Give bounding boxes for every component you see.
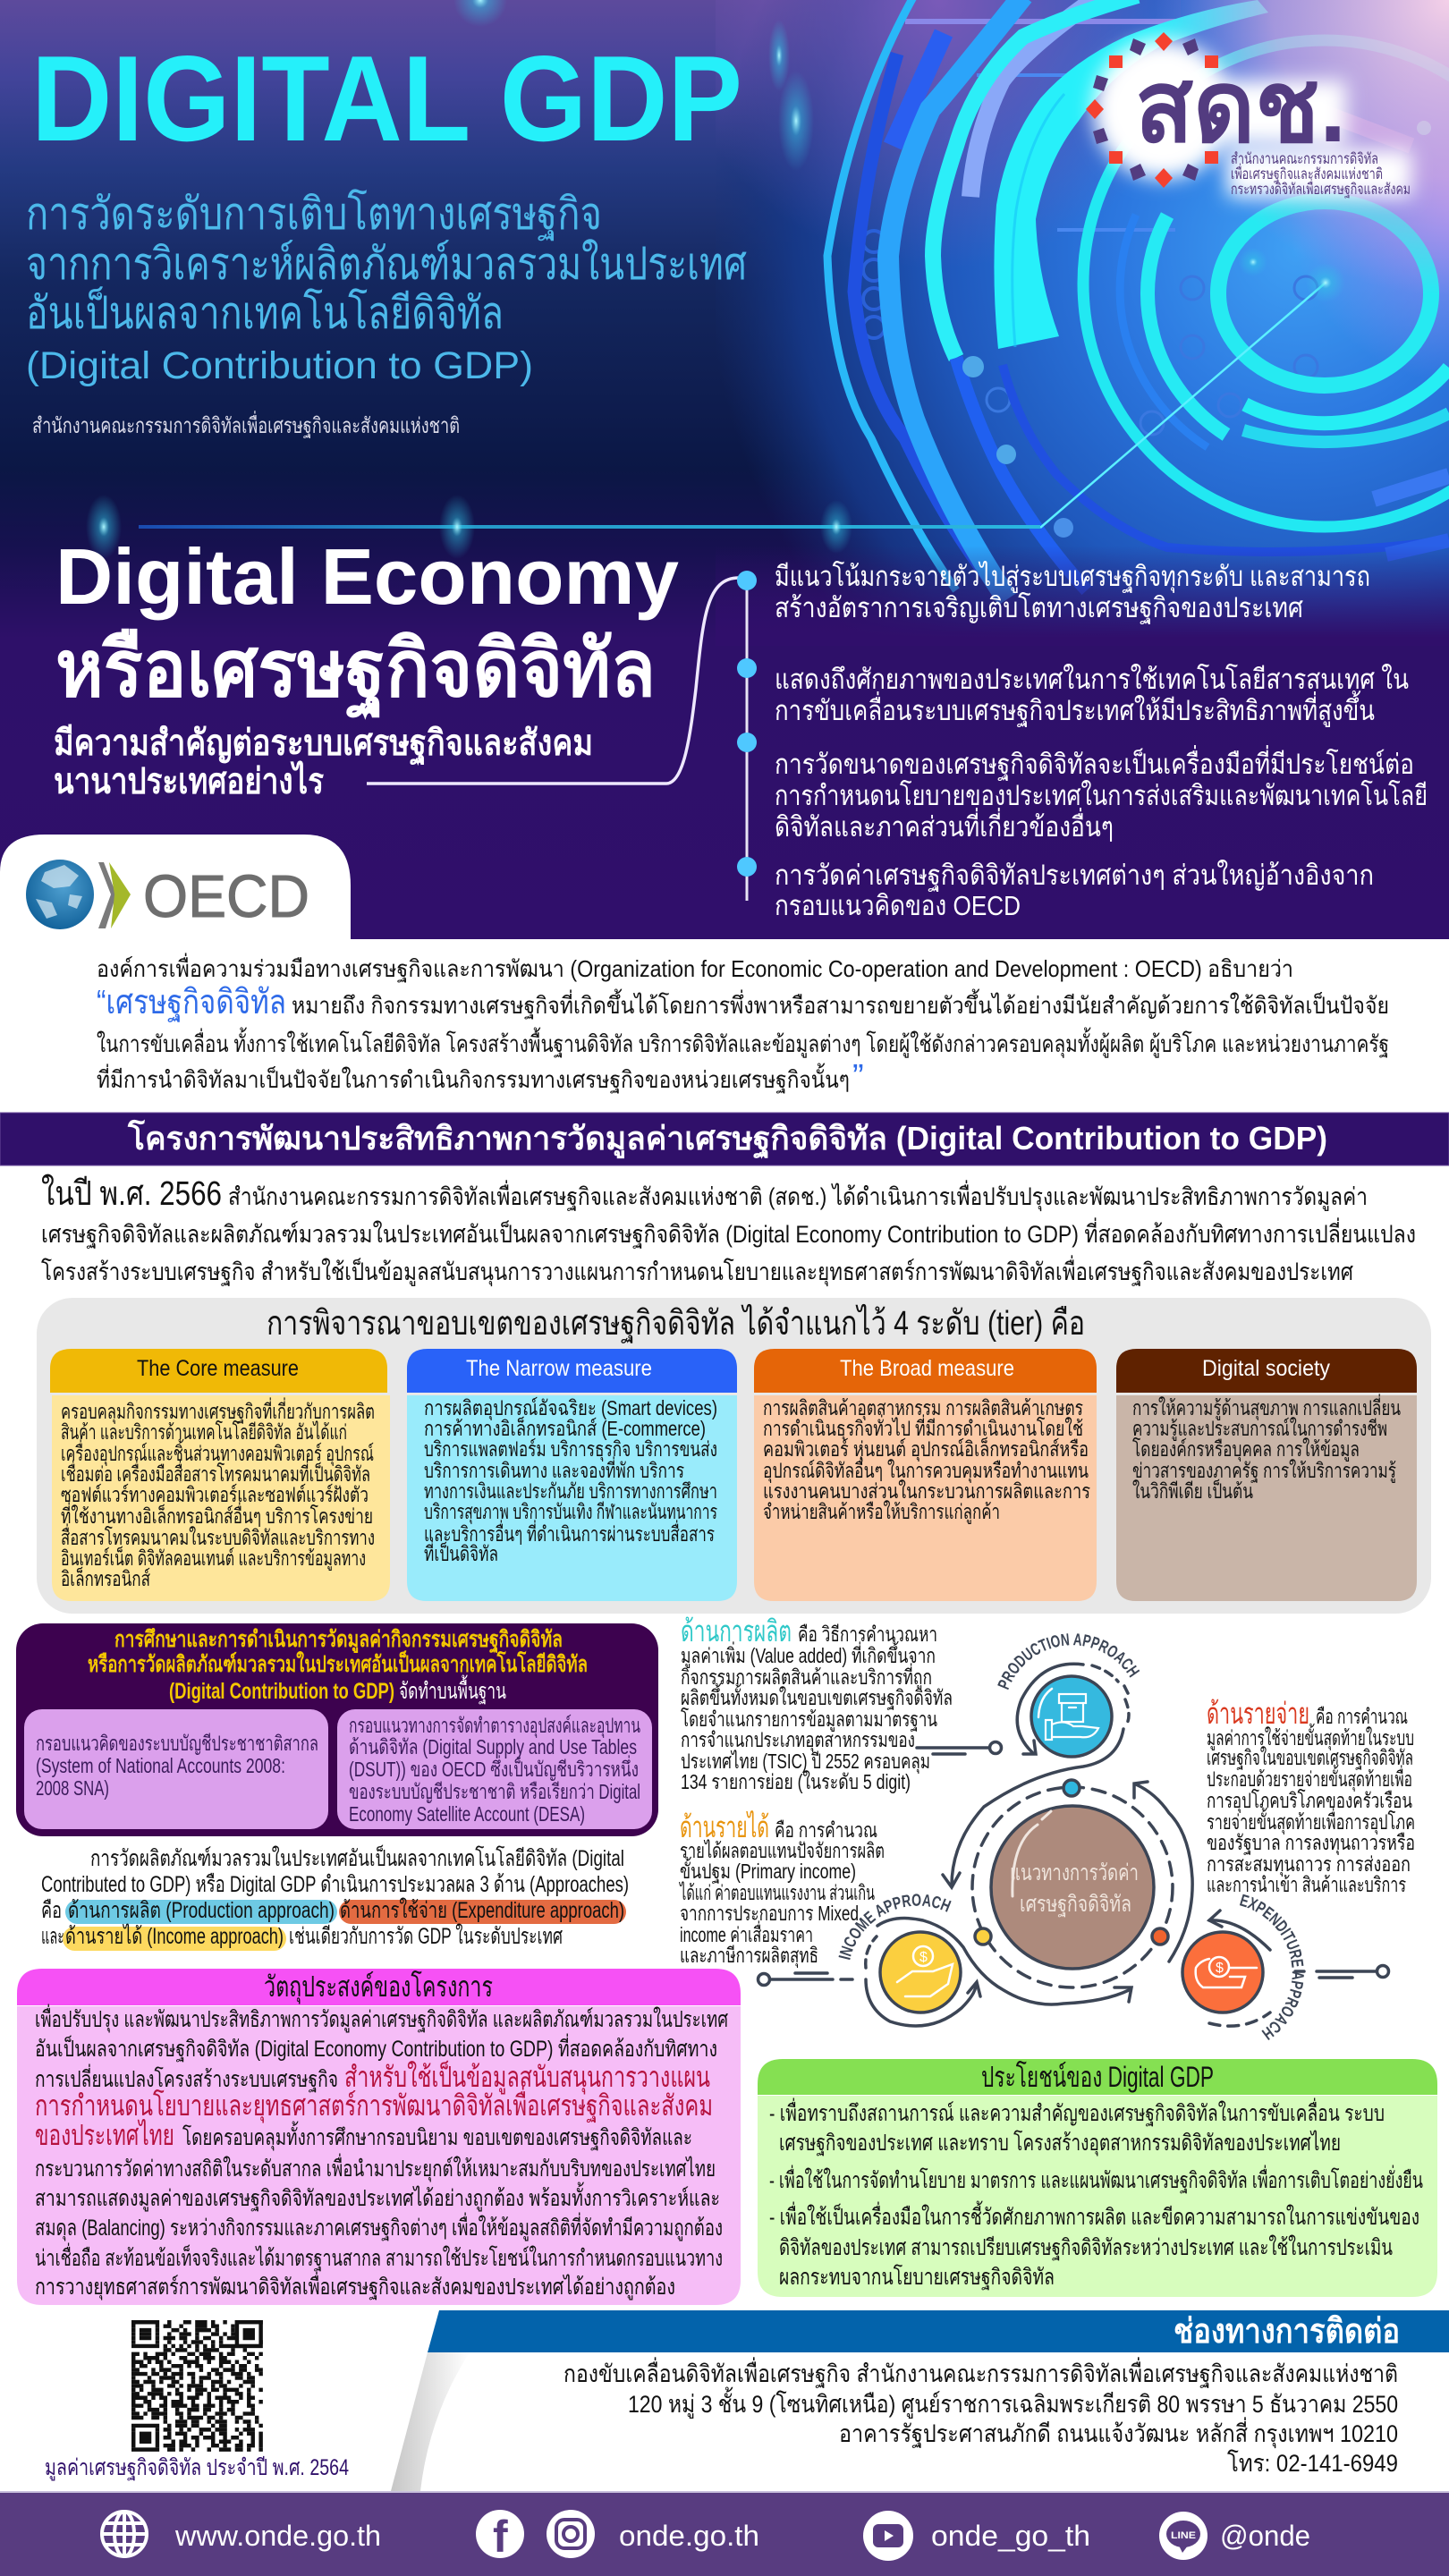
text block: three approaches: เช่นเดียวกับการวัด GDP ในระดับประเทศ — [289, 1923, 563, 1949]
panel: contact: ช่องทางการติดต่อ — [1174, 2313, 1400, 2351]
youtube text: onde_go_th — [931, 2520, 1090, 2552]
panel: project objectives: การเปลี่ยนแปลงโครงสร้างระบบเศรษฐกิจ — [35, 2063, 338, 2092]
text block: three approaches: การวัดผลิตภัณฑ์มวลรวมในประเทศอันเป็นผลจากเทคโนโลยีดิจิทัล (Digital — [90, 1844, 624, 1871]
text block: income approach: คือ การคำนวณ — [775, 1818, 877, 1842]
connector line and timeline dots — [367, 571, 757, 901]
heading: digital economy: มีความสำคัญต่อระบบเศรษฐกิจและสังคม — [54, 724, 593, 767]
card: digital society — [1116, 1349, 1417, 1601]
card: narrow measure: ทางการเงินและประกันภัย บริการทางการศึกษา — [424, 1479, 717, 1503]
icon: facebook — [476, 2510, 524, 2562]
text block: income approach: ได้แก่ ค่าตอบแทนแรงงาน ส่วนเกิน — [679, 1881, 875, 1904]
panel: measurement framework: หรือการวัดผลิตภัณฑ์มวลรวมในประเทศอันเป็นผลจากเทคโนโลยีดิจิทัล — [88, 1650, 588, 1677]
card: core measure: สื่อสารโทรคมนาคมในระบบดิจิทัลและบริการทาง — [61, 1523, 375, 1549]
subtitle block: อันเป็นผลจากเทคโนโลยีดิจิทัล — [26, 286, 504, 338]
QR code — [131, 2320, 263, 2450]
card: core measure: อินเทอร์เน็ต ดิจิทัลคอนเทนต์ และบริการข้อมูลทาง — [61, 1545, 366, 1571]
box: SNA: (System of National Accounts 2008: — [36, 1754, 285, 1777]
text block: project intro — [41, 1174, 1416, 1287]
central circle: แนวทางการวัดค่า — [1010, 1860, 1139, 1885]
text block: production approach: คือ วิธีการคำนวณหา — [798, 1623, 937, 1646]
panel: measurement framework: (Digital Contribution to GDP) — [169, 1679, 394, 1704]
panel: project objectives: วัตถุประสงค์ของโครงการ — [264, 1970, 493, 2004]
heading: digital economy: นานาประเทศอย่างไร — [54, 760, 324, 801]
panel: project objectives: การกำหนดนโยบายและยุทธศาสตร์การพัฒนาดิจิทัลเพื่อเศรษฐกิจและสังคม — [35, 2086, 713, 2123]
agency name: สำนักงานคณะกรรมการดิจิทัลเพื่อเศรษฐกิจและสังคมแห่งชาติ — [32, 411, 460, 438]
card: core measure: The Core measure — [137, 1356, 299, 1381]
QR caption: มูลค่าเศรษฐกิจดิจิทัล ประจำปี พ.ศ. 2564 — [45, 2455, 349, 2481]
logo: OECD — [0, 835, 351, 939]
facebook instagram text: onde.go.th — [619, 2520, 759, 2552]
text block: three approaches: ด้านรายได้ (Income approach) — [65, 1923, 284, 1949]
card: narrow measure: The Narrow measure — [466, 1356, 652, 1381]
card: core measure: เชื่อมต่อ เครื่องมือสื่อสารโทรคมนาคมที่เป็นดิจิทัล — [61, 1460, 370, 1486]
connector lines — [758, 1742, 1388, 1986]
text block: three approaches: และ — [41, 1924, 64, 1949]
text block: three approaches: Contributed to GDP) หรือ Digital GDP ดำเนินการประมวลผล 3 ด้าน (Approaches) — [41, 1872, 629, 1897]
icon: income coin and hand: $ — [919, 1950, 928, 1965]
card: narrow measure: บริการแพลตฟอร์ม บริการธุรกิจ บริการขนส่ง — [424, 1437, 717, 1462]
card: broad measure: คอมพิวเตอร์ หุ่นยนต์ อุปกรณ์อิเล็กทรอนิกส์หรือ — [763, 1436, 1089, 1462]
node dots — [975, 1780, 1168, 1945]
panel: project objectives: โดยครอบคลุมทั้งการศึกษากรอบนิยาม ขอบเขตของเศรษฐกิจดิจิทัลและ — [182, 2121, 692, 2151]
panel: project objectives: กระบวนการวัดค่าทางสถิติในระดับสากล เพื่อนำมาประยุกต์ให้เหมาะสมกับบริบทของประเทศไทย — [35, 2153, 716, 2182]
icon: line — [1159, 2512, 1208, 2560]
text block: OECD definition: ที่มีการนำดิจิทัลมาเป็นปัจจัยในการดำเนินกิจกรรมทางเศรษฐกิจของหน่วยเศรษฐกิจนั้นๆ — [97, 1063, 850, 1094]
card: digital society: Digital society — [1202, 1356, 1330, 1381]
text block: income approach: จากการประกอบการ Mixed — [680, 1902, 859, 1925]
card: broad measure — [754, 1349, 1097, 1601]
heading: tiers: การพิจารณาขอบเขตของเศรษฐกิจดิจิทัล ได้จำแนกไว้ 4 ระดับ (tier) คือ — [267, 1304, 1085, 1343]
key points list: การวัดค่าเศรษฐกิจดิจิทัลประเทศต่างๆ ส่วนใหญ่อ้างอิงจาก — [775, 860, 1374, 892]
panel: contact — [391, 2310, 1449, 2491]
card: core measure: สินค้า และบริการด้านเทคโนโลยีดิจิทัล อันได้แก่ — [61, 1420, 347, 1444]
logo: ONDE: สำนักงานคณะกรรมการดิจิทัล — [1231, 150, 1378, 167]
panel: project objectives: น่าเชื่อถือ สะท้อนข้อเท็จจริงและได้มาตรฐานสากล สามารถใช้ประโยชน์ในการกำหนดกรอบแนวทาง — [35, 2242, 723, 2271]
card: broad measure: The Broad measure — [840, 1356, 1014, 1381]
curved labels: PRODUCTION APPROACH — [997, 1633, 1140, 1690]
panel: project objectives: เพื่อปรับปรุง และพัฒนาประสิทธิภาพการวัดมูลค่าเศรษฐกิจดิจิทัล และผลิตภัณฑ์มวลรวมในประเทศ — [35, 2004, 728, 2033]
box: DSUT: Economy Satellite Account (DESA) — [349, 1802, 585, 1826]
text block: OECD definition: ” — [852, 1058, 864, 1096]
website text: www.onde.go.th — [174, 2520, 381, 2552]
box: SNA — [24, 1709, 328, 1829]
text block: three approaches: คือ — [41, 1898, 62, 1923]
text block: three approaches: ด้านการใช้จ่าย (Expenditure approach) — [340, 1897, 624, 1923]
key points list: สร้างอัตราการเจริญเติบโตทางเศรษฐกิจของประเทศ — [775, 592, 1303, 624]
flow arrows — [866, 1664, 1270, 2026]
panel: project objectives: สมดุล (Balancing) ระหว่างกิจกรรมและภาคเศรษฐกิจต่างๆ เพื่อให้ข้อมูลสถิติที่จัดทำมีความถูกต้อง — [35, 2212, 723, 2241]
card: core measure: เครื่องอุปกรณ์และชิ้นส่วนทางคอมพิวเตอร์ อุปกรณ์ — [61, 1439, 374, 1466]
text block: income approach: income ค่าเสื่อมราคา — [680, 1920, 813, 1946]
text block: production approach: การจำแนกประเภทอุตสาหกรรมของ — [681, 1728, 915, 1752]
panel: project objectives: สำหรับใช้เป็นข้อมูลสนับสนุนการวางแผน — [344, 2060, 710, 2095]
card: narrow measure: การค้าทางอิเล็กทรอนิกส์ (E-commerce) — [424, 1415, 706, 1440]
text block: income approach: ขั้นปฐม (Primary income) — [680, 1857, 856, 1884]
subtitle block: จากการวิเคราะห์ผลิตภัณฑ์มวลรวมในประเทศ — [26, 239, 747, 289]
panel: footer — [0, 2491, 1449, 2576]
central circle — [991, 1806, 1154, 1969]
box: SNA: 2008 SNA) — [36, 1776, 109, 1800]
icon: youtube — [863, 2511, 913, 2561]
card: narrow measure: บริการสุขภาพ บริการบันเทิง กีฬาและนันทนาการ — [424, 1500, 717, 1524]
text block: production approach: มูลค่าเพิ่ม (Value added) ที่เกิดขึ้นจาก — [681, 1641, 936, 1668]
card: digital society: ในวิกิพีเดีย เป็นต้น — [1132, 1478, 1253, 1503]
card: core measure: ครอบคลุมกิจกรรมทางเศรษฐกิจที่เกี่ยวกับการผลิต — [61, 1397, 375, 1424]
curved labels: INCOME APPROACH — [839, 1894, 952, 1961]
card: core measure: ซอฟต์แวร์ทางคอมพิวเตอร์และซอฟต์แวร์ฝังตัว — [61, 1483, 369, 1506]
text block: income approach — [679, 1810, 885, 1968]
logo: ONDE: เพื่อเศรษฐกิจและสังคมแห่งชาติ — [1231, 163, 1383, 183]
text block: OECD definition: “เศรษฐกิจดิจิทัล — [97, 984, 286, 1022]
panel: measurement framework: การศึกษาและการดำเนินการวัดมูลค่ากิจกรรมเศรษฐกิจดิจิทัล — [114, 1627, 563, 1654]
text block: production approach: 134 รายการย่อย (ในระดับ 5 digit) — [681, 1770, 911, 1793]
central circle: เศรษฐกิจดิจิทัล — [1020, 1892, 1131, 1917]
text block: production approach: ด้านการผลิต — [681, 1614, 792, 1648]
text block: income approach: และภาษีการผลิตสุทธิ — [680, 1944, 818, 1968]
icon: income coin and hand — [880, 1932, 961, 2012]
text block: project intro: ในปี พ.ศ. 2566 — [41, 1174, 222, 1213]
heading: digital economy: Digital Economy — [55, 532, 679, 621]
logo: ONDE: สดช. — [1135, 51, 1346, 163]
box: DSUT: กรอบแนวทางการจัดทำตารางอุปสงค์และอุปทาน — [349, 1714, 640, 1738]
card: narrow measure: การผลิตอุปกรณ์อัจฉริยะ (Smart devices) — [424, 1396, 717, 1420]
curved labels — [839, 1633, 1304, 2040]
panel: benefits — [758, 2059, 1437, 2297]
panel: benefits: ผลกระทบจากนโยบายเศรษฐกิจดิจิทัล — [779, 2264, 1055, 2290]
panel: project objectives: การวางยุทธศาสตร์การพัฒนาดิจิทัลเพื่อเศรษฐกิจและสังคมของประเทศได้อย่างถูกต้อง — [35, 2271, 675, 2301]
panel: benefits: ประโยชน์ของ Digital GDP — [981, 2061, 1214, 2093]
text block: OECD definition: องค์การเพื่อความร่วมมือทางเศรษฐกิจและการพัฒนา (Organization for Economic Co-operation and Development : OECD) อธิบายว่า — [97, 953, 1293, 983]
panel: measurement framework: จัดทำบนพื้นฐาน — [399, 1674, 506, 1704]
card: digital society: โดยองค์กรหรือบุคคล การให้ข้อมูล — [1132, 1437, 1360, 1462]
heading: digital economy — [54, 532, 679, 801]
panel: four tiers — [37, 1298, 1431, 1614]
box: SNA: กรอบแนวคิดของระบบบัญชีประชาชาติสากล — [36, 1732, 318, 1755]
icon: line: LINE — [1171, 2530, 1196, 2541]
card: broad measure: แรงงานคนบางส่วนในกระบวนการผลิตและการ — [763, 1479, 1090, 1503]
text block: income approach: รายได้ผลตอบแทนปัจจัยการผลิต — [680, 1839, 885, 1862]
key points list — [775, 561, 1428, 921]
card: core measure: ที่ใช้งานทางอิเล็กทรอนิกส์อื่นๆ บริการโครงข่าย — [61, 1502, 373, 1528]
card: narrow measure: ที่เป็นดิจิทัล — [424, 1539, 498, 1565]
panel: contact: โทร: 02-141-6949 — [1227, 2450, 1398, 2477]
title: DIGITAL GDP — [31, 30, 742, 166]
panel: hero banner — [0, 0, 1449, 939]
panel: project objectives — [17, 1969, 741, 2305]
chart: approaches cycle diagram — [757, 1633, 1390, 2040]
subtitle block: การวัดระดับการเติบโตทางเศรษฐกิจ — [26, 189, 602, 241]
card: narrow measure: บริการการเดินทาง และจองที่พัก บริการ — [424, 1456, 684, 1482]
panel: project objectives: สามารถแสดงมูลค่าของเศรษฐกิจดิจิทัลของประเทศได้อย่างถูกต้อง พร้อมทั้งการวิเคราะห์และ — [35, 2182, 720, 2212]
text block: three approaches: ด้านการผลิต (Production approach) — [68, 1898, 335, 1923]
text block: expenditure approach: คือ การคำนวณ — [1316, 1705, 1408, 1728]
text block: expenditure approach — [1207, 1697, 1415, 1896]
text block: expenditure approach: ด้านรายจ่าย — [1207, 1697, 1309, 1730]
icon: expenditure coin and hand — [1182, 1932, 1263, 2012]
text block: production approach — [681, 1614, 953, 1793]
box: DSUT: (DSUT)) ของ OECD ซึ่งเป็นบัญชีบริวารหนึ่ง — [349, 1755, 639, 1781]
card: core measure — [50, 1349, 390, 1601]
icon: website — [102, 2512, 147, 2556]
subtitle block — [26, 189, 747, 387]
section banner — [0, 1113, 1449, 1165]
text block: production approach: โดยจำแนกรายการข้อมูลตามมาตรฐาน — [681, 1707, 937, 1732]
section banner: โครงการพัฒนาประสิทธิภาพการวัดมูลค่าเศรษฐกิจดิจิทัล (Digital Contribution to GDP) — [127, 1119, 1327, 1159]
card: broad measure: การดำเนินธุรกิจทั่วไป ที่มีการดำเนินงานโดยใช้ — [763, 1414, 1083, 1441]
text block: OECD definition — [97, 953, 1389, 1096]
text block: production approach: กิจกรรมการผลิตสินค้าและบริการที่ถูก — [681, 1663, 932, 1690]
text block: three approaches — [41, 1844, 629, 1951]
panel: project objectives: อันเป็นผลจากเศรษฐกิจดิจิทัล (Digital Economy Contribution to GDP) ที่สอดคล้องกับทิศทาง — [35, 2033, 717, 2062]
card: narrow measure: และบริการอื่นๆ ที่ดำเนินการผ่านระบบสื่อสาร — [424, 1520, 715, 1546]
line text: @onde — [1220, 2520, 1310, 2552]
icon: facebook: f — [493, 2512, 508, 2562]
text block: income approach: ด้านรายได้ — [680, 1810, 769, 1843]
card: core measure: อิเล็กทรอนิกส์ — [61, 1565, 150, 1590]
box: DSUT: ด้านดิจิทัล (Digital Supply and Use Tables — [349, 1735, 637, 1758]
panel: project objectives: ของประเทศไทย — [35, 2119, 174, 2151]
text block: production approach: ผลิตขึ้นทั้งหมดในขอบเขตเศรษฐกิจดิจิทัล — [681, 1683, 953, 1710]
logo: ONDE — [1086, 32, 1411, 199]
box: DSUT: ของระบบบัญชีประชาชาติ หรือเรียกว่า Digital — [349, 1780, 640, 1803]
card: broad measure: อุปกรณ์ดิจิทัลอื่นๆ ในการควบคุมหรือทำงานแทน — [763, 1456, 1089, 1483]
card: broad measure: จำหน่ายสินค้าหรือให้บริการแก่ลูกค้า — [763, 1500, 1000, 1524]
logo: OECD: OECD — [143, 863, 309, 930]
icon: instagram — [547, 2510, 595, 2558]
icon: expenditure coin and hand: $ — [1216, 1961, 1224, 1976]
card: broad measure: การผลิตสินค้าอุตสาหกรรม การผลิตสินค้าเกษตร — [763, 1396, 1083, 1420]
subtitle block: (Digital Contribution to GDP) — [26, 344, 533, 387]
icon: production box and hand — [1031, 1676, 1112, 1757]
key points list: กรอบแนวคิดของ OECD — [775, 890, 1021, 921]
key points list: ดิจิทัลและภาคส่วนที่เกี่ยวข้องอื่นๆ — [775, 808, 1114, 843]
heading: digital economy: หรือเศรษฐกิจดิจิทัล — [55, 624, 656, 720]
curved labels: EXPENDITURE APPROACH — [1240, 1894, 1304, 2040]
card: narrow measure — [407, 1349, 737, 1601]
box: DSUT — [337, 1709, 652, 1829]
text block: production approach: ประเทศไทย (TSIC) ปี 2552 ครอบคลุม — [681, 1750, 930, 1774]
panel: measurement framework — [16, 1623, 658, 1836]
